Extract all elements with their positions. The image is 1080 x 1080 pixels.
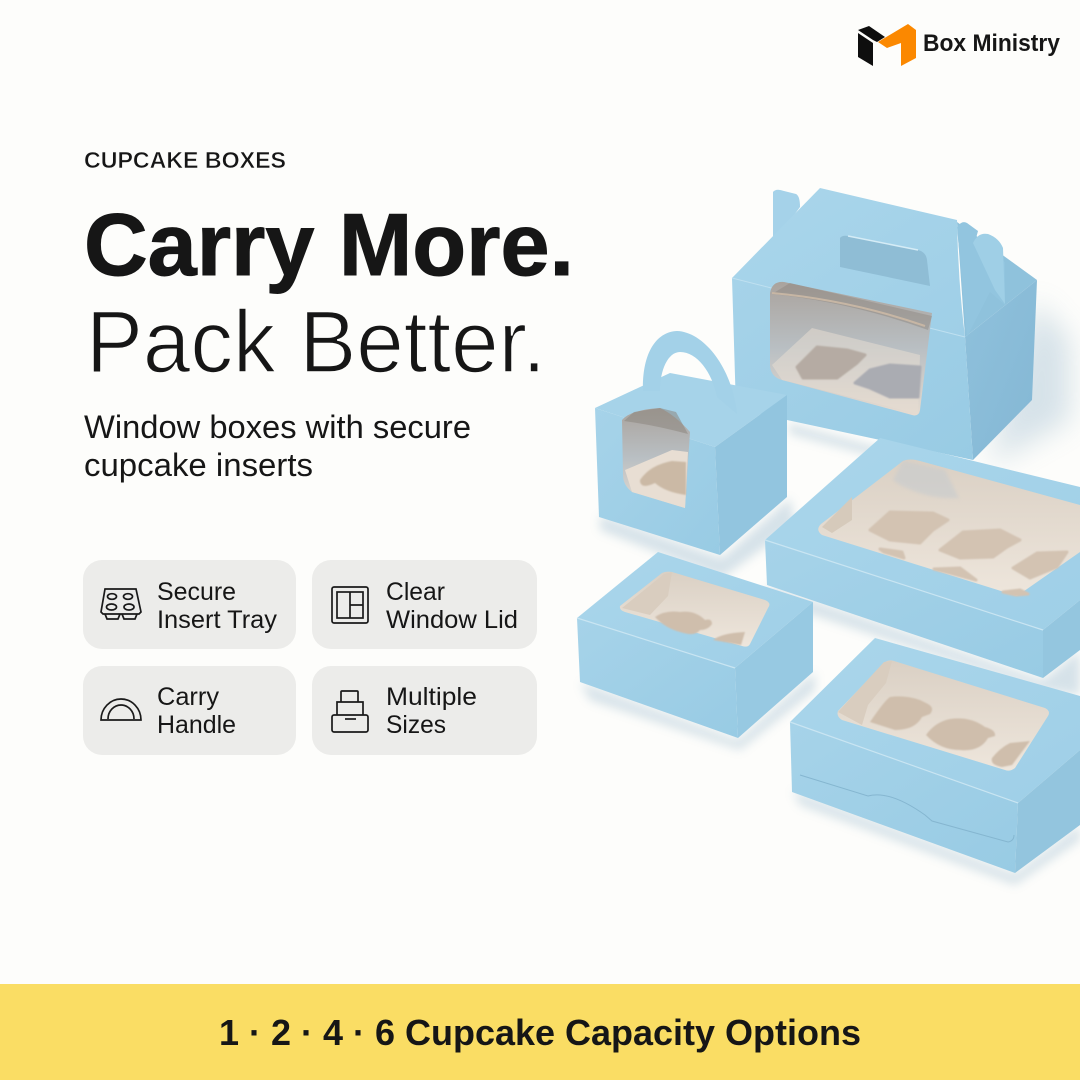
tuck flap outline <box>800 775 1014 842</box>
headline line 1: Carry More. <box>84 195 574 294</box>
window insert tray <box>772 328 920 414</box>
front lip highlight <box>765 540 1043 630</box>
top panel <box>577 552 813 668</box>
window reflection <box>893 461 960 501</box>
arch handle <box>643 331 737 414</box>
subheading: Window boxes with secure <box>84 409 471 445</box>
box: large gable box with handle <box>732 188 1037 460</box>
feature card: carry handle: Carry <box>157 683 220 711</box>
front gable panel <box>732 188 965 337</box>
feature card: carry handle: Handle <box>157 711 236 739</box>
feature card: multiple sizes <box>312 666 537 755</box>
feature card: multiple sizes: Sizes <box>386 711 446 739</box>
front face <box>577 618 738 738</box>
window <box>838 660 1049 771</box>
front face <box>732 278 973 460</box>
feature card: secure insert tray <box>83 560 296 649</box>
handle cutout <box>840 236 930 286</box>
top panel <box>595 373 787 447</box>
box: six cupcake box with tuck flap <box>790 638 1080 873</box>
logo mark <box>858 24 916 66</box>
icon: carry handle <box>101 699 141 720</box>
icon: window lid <box>332 587 368 623</box>
feature card: clear window lid <box>312 560 537 649</box>
icon: stacked boxes <box>332 691 368 732</box>
left tab <box>773 190 800 240</box>
cupcake cavities <box>655 612 745 645</box>
right face <box>715 395 787 555</box>
feature card: multiple sizes: Multiple <box>386 683 477 711</box>
cupcake cavities <box>797 347 920 397</box>
top panel <box>790 638 1080 803</box>
right tab <box>973 234 1005 304</box>
box: single cupcake box with arch handle <box>595 331 787 555</box>
capacity options text: 1 · 2 · 4 · 6 Cupcake Capacity Options <box>219 1012 861 1053</box>
brand name: Box Ministry <box>923 30 1060 57</box>
cupcake cavities <box>870 512 1067 595</box>
cupcake cavities <box>870 696 1030 767</box>
eyebrow label: CUPCAKE BOXES <box>84 147 286 173</box>
subheading: cupcake inserts <box>84 447 313 483</box>
feature card: clear window lid: Clear <box>386 578 445 606</box>
front face <box>790 722 1018 873</box>
product photo: cupcake boxes <box>577 188 1080 885</box>
right roof panel <box>957 222 1037 337</box>
right side face <box>965 280 1037 460</box>
feature card: carry handle <box>83 666 296 755</box>
headline <box>84 195 574 391</box>
insert <box>625 450 688 508</box>
window <box>818 460 1080 596</box>
display window <box>770 282 932 415</box>
side face <box>1043 600 1080 678</box>
front face <box>765 540 1043 678</box>
logo: Box Ministry <box>858 24 1060 66</box>
box: large six cupcake box <box>765 438 1080 678</box>
top panel <box>765 438 1080 630</box>
bottom banner <box>0 984 1080 1080</box>
front face <box>595 408 720 555</box>
feature card: secure insert tray: Secure <box>157 578 236 606</box>
side face <box>1015 750 1080 873</box>
back flap <box>957 222 1005 337</box>
side face <box>735 602 813 738</box>
subheading <box>84 409 471 483</box>
window <box>620 572 769 647</box>
box shadows <box>580 300 1080 885</box>
feature card: secure insert tray: Insert Tray <box>157 606 278 634</box>
icon: insert tray <box>101 589 141 619</box>
box: small four cupcake box <box>577 552 813 738</box>
headline line 2: Pack Better. <box>86 292 546 391</box>
feature card: clear window lid: Window Lid <box>386 606 518 634</box>
window <box>622 408 690 508</box>
